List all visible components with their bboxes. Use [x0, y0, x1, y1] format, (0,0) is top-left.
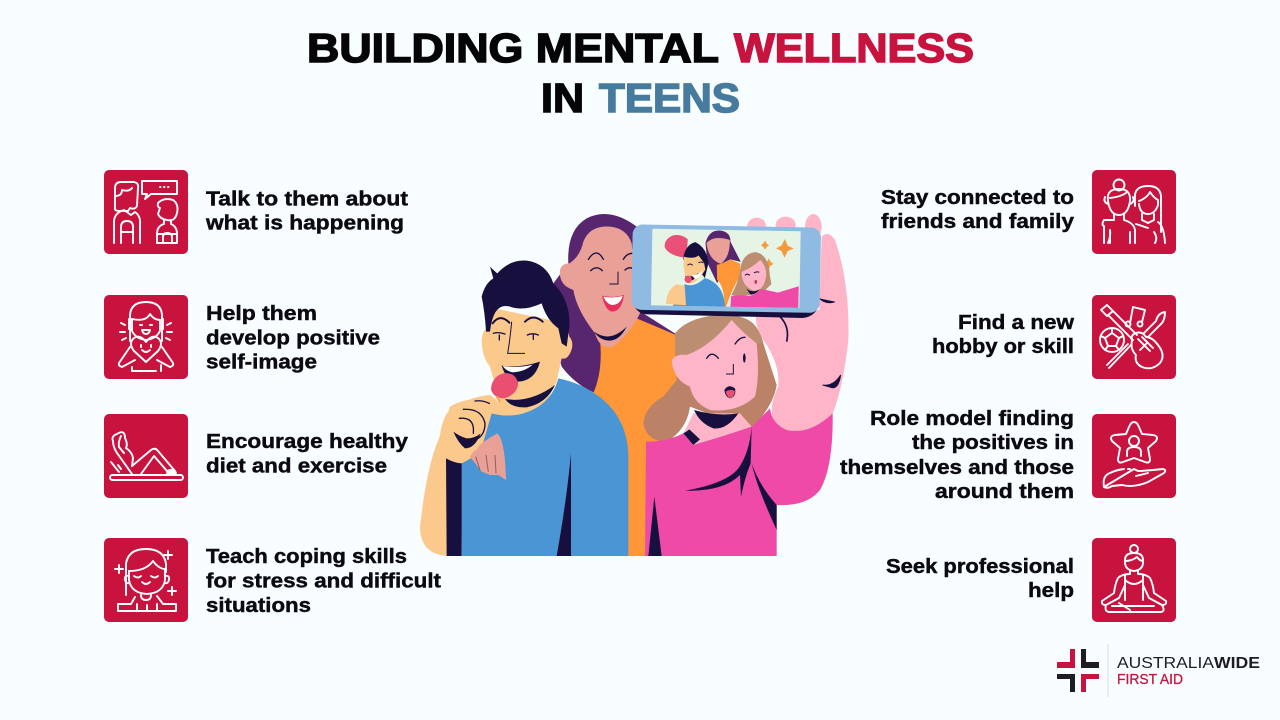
label: positive self-image: self-image	[206, 350, 317, 374]
label: role model: the positives in	[912, 431, 1074, 454]
tip: talk to them	[104, 170, 408, 254]
tip: coping skills	[104, 538, 441, 622]
label: coping skills: Teach coping skills	[206, 545, 407, 568]
logo: Australia Wide First Aid	[1057, 644, 1260, 697]
title	[307, 25, 974, 121]
illustration: three teens taking a selfie	[420, 214, 848, 556]
panel: right tips	[840, 170, 1176, 622]
label: coping skills: situations	[206, 594, 311, 617]
icon: person doing sit-ups	[104, 414, 188, 498]
logo mark: cross	[1057, 649, 1099, 692]
label: talk to them: what is happening	[205, 212, 404, 234]
tip: new hobby	[932, 295, 1176, 379]
girl taking selfie	[643, 214, 848, 556]
label: coping skills	[206, 545, 441, 617]
tip: professional help	[886, 538, 1176, 622]
label: new hobby: hobby or skill	[932, 335, 1074, 358]
logo text: WIDE	[1214, 655, 1260, 672]
label: professional help: Seek professional	[886, 555, 1074, 578]
phone with selfie on screen	[631, 224, 821, 318]
tip: role model	[840, 407, 1176, 503]
label: role model: Role model finding	[870, 407, 1074, 430]
label: diet and exercise	[206, 430, 409, 478]
icon: two friends	[1092, 170, 1176, 254]
title: TEENS	[599, 75, 740, 121]
label: diet and exercise: diet and exercise	[206, 454, 387, 478]
label: positive self-image: Help them	[206, 302, 317, 325]
title: WELLNESS	[734, 25, 974, 71]
icon: star person over hand	[1092, 414, 1176, 498]
label: new hobby: Find a new	[958, 311, 1074, 334]
icon: girl holding heart	[104, 295, 188, 379]
tip: stay connected	[881, 170, 1176, 254]
logo text: AUSTRALIA	[1117, 655, 1215, 672]
label: positive self-image	[206, 302, 380, 374]
icon: person in lotus pose	[1092, 538, 1176, 622]
boy with lollipop	[420, 261, 628, 556]
icon: meditating child	[104, 538, 188, 622]
label: stay connected: friends and family	[881, 210, 1075, 233]
label: positive self-image: develop positive	[206, 326, 380, 350]
title: IN	[541, 75, 584, 121]
label: diet and exercise: Encourage healthy	[206, 430, 409, 453]
label: stay connected	[881, 186, 1075, 233]
label: professional help: help	[1028, 579, 1074, 602]
icon: guitar, ball, music and brush	[1092, 295, 1176, 379]
label: role model: themselves and those	[840, 456, 1074, 479]
icon: two people talking	[104, 170, 188, 254]
label: talk to them: Talk to them about	[206, 188, 408, 210]
label: role model: around them	[935, 480, 1074, 503]
tip: positive self-image	[104, 295, 380, 379]
label: talk to them	[205, 188, 408, 234]
logo text	[1117, 655, 1260, 688]
label: stay connected: Stay connected to	[881, 186, 1074, 209]
label: new hobby	[932, 311, 1074, 358]
back person	[553, 214, 680, 556]
label: coping skills: for stress and difficult	[206, 570, 441, 592]
panel: left tips	[104, 170, 441, 622]
logo text: FIRST AID	[1117, 672, 1183, 688]
tip: diet and exercise	[104, 414, 409, 498]
label: role model	[840, 407, 1074, 503]
title: BUILDING MENTAL	[307, 25, 719, 71]
label: professional help	[886, 555, 1074, 602]
